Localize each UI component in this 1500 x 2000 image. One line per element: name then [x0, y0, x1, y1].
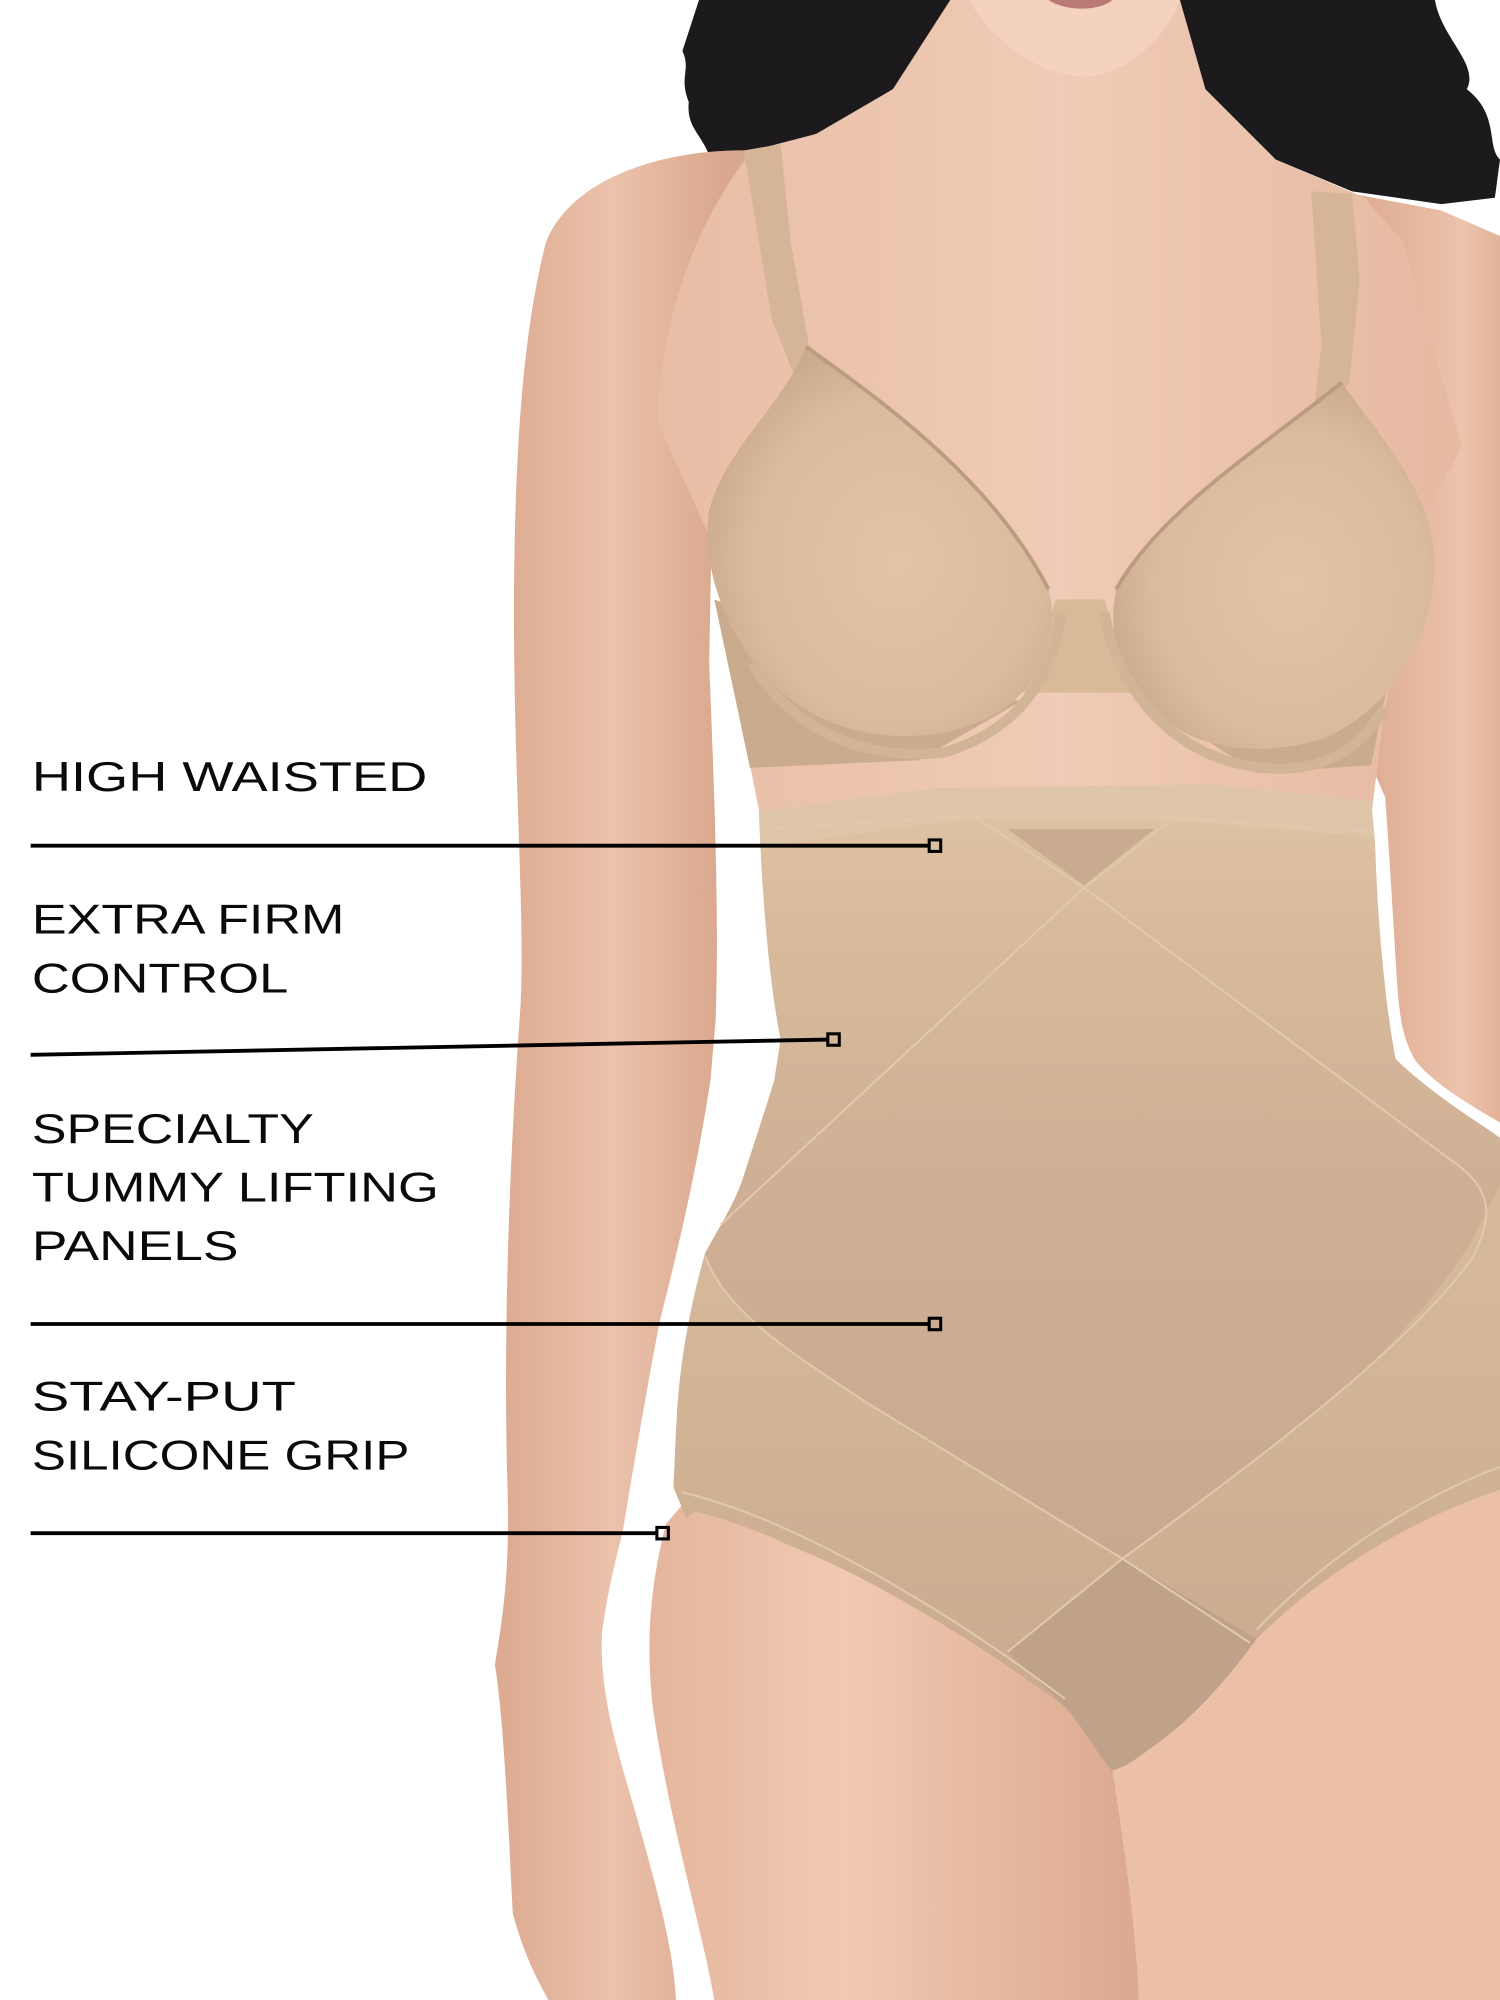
label [32, 1373, 409, 1478]
chin and lip [969, 0, 1180, 77]
marker [828, 1034, 839, 1045]
label [32, 896, 344, 1001]
right band [1148, 676, 1388, 773]
left arm and shoulder [495, 150, 753, 2000]
right arm and shoulder [1339, 191, 1500, 1122]
label: SPECIALTY [32, 1105, 314, 1152]
mesh triangle [1008, 829, 1154, 885]
label: STAY-PUT [32, 1373, 296, 1420]
callout: high waisted [31, 753, 941, 851]
leader line [31, 844, 929, 847]
callout: extra firm control [31, 896, 839, 1055]
left thigh [649, 1467, 1139, 2000]
right strap [1311, 191, 1360, 415]
leader line [31, 1322, 929, 1325]
left band [714, 599, 1020, 768]
label: PANELS [32, 1222, 239, 1269]
label: HIGH WAISTED [32, 753, 427, 800]
waistband [759, 784, 1374, 847]
callout: specialty tummy lifting panels [31, 1105, 941, 1330]
left strap [744, 144, 842, 383]
label: SILICONE GRIP [32, 1431, 409, 1478]
brief base [673, 784, 1500, 1770]
figure wearing the garment [495, 0, 1500, 2000]
center gore [1020, 599, 1130, 693]
callout: stay-put silicone grip [31, 1373, 668, 1539]
gusset panel [1008, 1559, 1256, 1770]
seams [682, 788, 1500, 1699]
side panel left [673, 1256, 1122, 1707]
marker [657, 1527, 668, 1539]
marker [929, 840, 941, 851]
label: CONTROL [32, 954, 288, 1001]
leader line [31, 1040, 828, 1055]
leader line [31, 1532, 657, 1535]
marker [929, 1318, 941, 1330]
bra [708, 144, 1434, 773]
neckline trim [806, 347, 1342, 589]
side panel right [1122, 1186, 1500, 1639]
torso and chest skin [657, 0, 1462, 816]
shapewear brief [673, 784, 1500, 1770]
right thigh [1112, 1454, 1500, 2000]
hair [682, 0, 1500, 204]
left cup [708, 347, 1052, 736]
label: EXTRA FIRM [32, 896, 344, 943]
satin underwire trim [753, 612, 1384, 769]
label: TUMMY LIFTING [32, 1164, 439, 1211]
right cup [1113, 383, 1434, 749]
label [32, 1105, 439, 1269]
